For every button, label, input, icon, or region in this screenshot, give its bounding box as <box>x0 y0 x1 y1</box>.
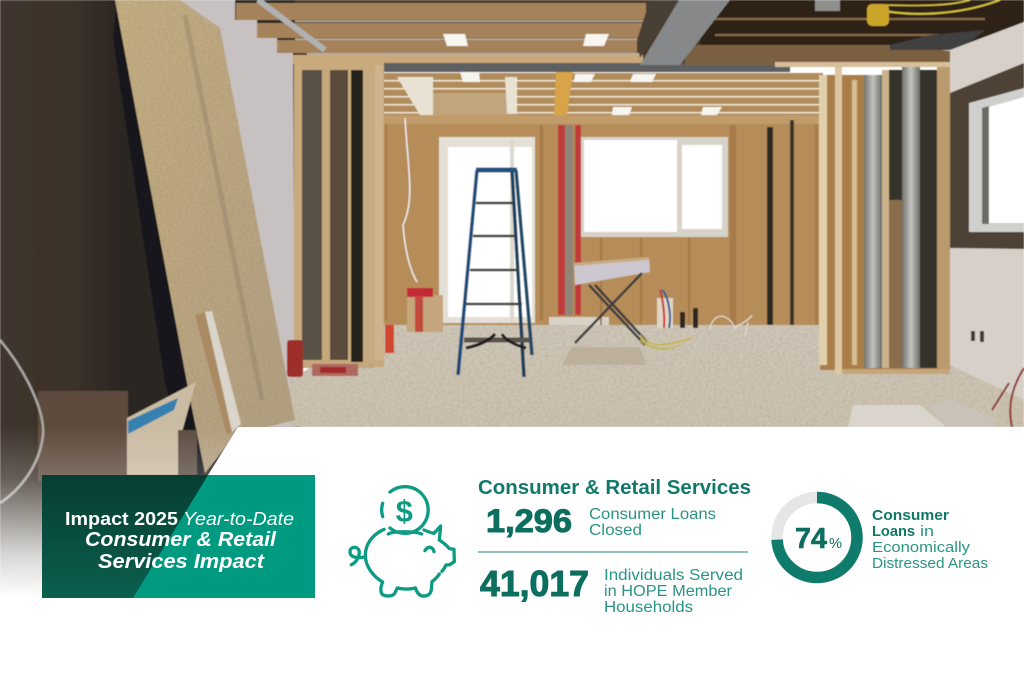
donut chart: 74 percent <box>777 498 857 578</box>
title line 3: Services Impact <box>98 551 265 573</box>
icon: piggy bank with dollar coin: $ <box>396 494 413 528</box>
title banner <box>42 475 315 598</box>
stat: 1,296 consumer loans closed <box>486 503 716 539</box>
donut caption: in <box>920 523 934 540</box>
cardboard boxes <box>38 382 197 481</box>
left image fade to white <box>0 427 238 597</box>
heading: consumer and retail services: Consumer & Retail Services <box>478 477 751 499</box>
silver pipe at upper left <box>258 0 325 50</box>
white cable <box>403 118 417 282</box>
donut caption: Loans <box>872 523 915 540</box>
icon: piggy bank with dollar coin <box>350 487 454 596</box>
fire extinguishers <box>287 340 303 377</box>
ceiling: wooden joists <box>236 0 825 125</box>
donut chart: 74 percent: % <box>829 535 842 552</box>
red cardboard box <box>407 288 443 332</box>
stat: 41,017 individuals served: Individuals Served <box>604 567 743 584</box>
donut caption: Distressed Areas <box>872 555 988 572</box>
red wrap strips <box>558 125 565 315</box>
donut caption: Consumer <box>872 507 949 524</box>
sawhorse table <box>562 257 692 365</box>
stat: 1,296 consumer loans closed: Closed <box>589 522 642 539</box>
leaning lumber <box>195 312 239 435</box>
title line 2: Consumer & Retail <box>85 529 276 551</box>
door opening <box>439 137 535 323</box>
donut caption: Economically <box>872 539 971 556</box>
OSB board <box>115 0 295 473</box>
metal duct <box>640 0 730 65</box>
stat: 1,296 consumer loans closed: 1,296 <box>486 503 572 539</box>
donut chart: 74 percent: 74 <box>795 523 827 555</box>
floor <box>290 325 1024 427</box>
left stud wall with dark column <box>294 62 384 368</box>
white panel <box>0 427 1024 682</box>
back wall: wood sheathing <box>295 110 965 335</box>
dark ceiling at right <box>700 0 1024 45</box>
stat: 41,017 individuals served: Households <box>604 599 693 616</box>
stat: 41,017 individuals served: 41,017 <box>480 563 589 604</box>
stat: 41,017 individuals served <box>480 563 743 616</box>
items at lower right <box>848 368 1024 427</box>
donut caption <box>872 507 988 572</box>
stat: 1,296 consumer loans closed: Consumer Loans <box>589 506 716 523</box>
pipes and wires on back wall <box>657 298 673 328</box>
ceiling lights <box>443 34 722 115</box>
right stud wall and ducts <box>775 62 955 374</box>
window <box>580 137 728 237</box>
white wall on the left <box>180 0 295 430</box>
wire at left <box>0 340 43 503</box>
stat: 41,017 individuals served: in HOPE Member <box>604 583 732 600</box>
title banner: Year-to-Date <box>183 509 294 529</box>
stepladder <box>458 170 532 377</box>
wall studs <box>385 125 818 325</box>
title line 1: Impact 2025 <box>65 509 178 529</box>
right drywall and window <box>950 22 1024 400</box>
dark board edge <box>113 10 205 480</box>
